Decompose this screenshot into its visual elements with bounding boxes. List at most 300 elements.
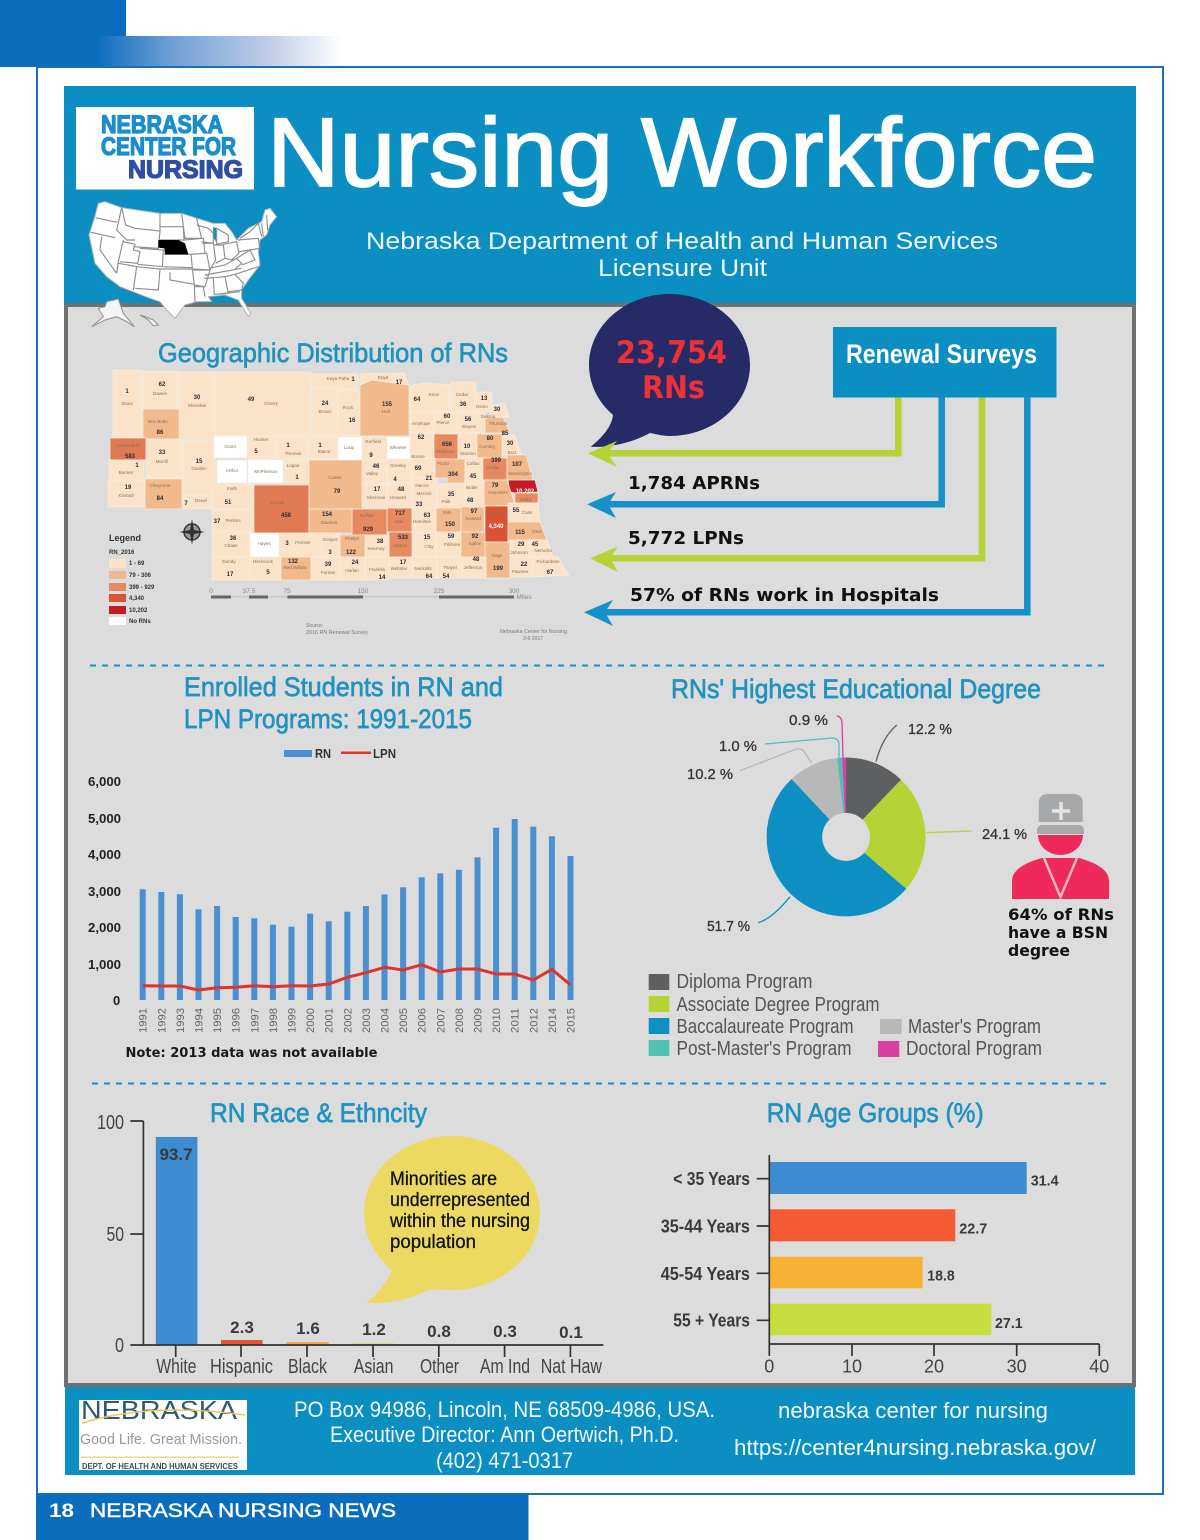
text: survey statistics: 1,784 APRNs <box>628 473 760 494</box>
county labels: Morrill <box>156 459 168 464</box>
magazine footer bar: NEBRASKA NURSING NEWS <box>90 1501 396 1522</box>
county labels: Johnson <box>510 550 528 555</box>
county labels: 24 <box>352 560 359 566</box>
county labels: 29 <box>518 542 525 548</box>
county labels: Nance <box>415 483 429 488</box>
icon: compass rose <box>179 519 205 545</box>
county labels: 4 <box>393 477 397 483</box>
map legend: Legend <box>109 533 141 543</box>
note: 2013 data: Note: 2013 data was not available <box>126 1046 378 1061</box>
website <box>734 1398 1097 1460</box>
map source notes: Source: <box>306 623 323 629</box>
county labels: 97 <box>471 509 478 515</box>
county labels: 45 <box>470 474 477 480</box>
contact details: Executive Director: Ann Oertwich, Ph.D. <box>330 1422 679 1447</box>
county labels: 69 <box>415 466 422 472</box>
subtitle: Nebraska Department of Health and Human Services <box>366 228 998 255</box>
county labels: Butler <box>466 485 478 490</box>
county labels: 1 <box>295 475 299 481</box>
bar chart: RN race and ethnicity: 50 <box>106 1224 124 1246</box>
county labels: Wheeler <box>389 445 407 450</box>
county labels: Arthur <box>226 468 239 473</box>
arrow: Renewal Surveys to RNs <box>588 397 898 467</box>
map legend: 1 - 69 <box>129 561 145 567</box>
bar chart: RN race and ethnicity: 2.3 <box>230 1318 254 1337</box>
county labels: 304 <box>448 472 459 478</box>
icon: Nebraska state <box>158 240 188 254</box>
county labels: 35 <box>448 492 455 498</box>
text: 64% of RNs have a BSN degree: 64% of RNs <box>1008 905 1114 924</box>
county labels: 132 <box>288 559 299 565</box>
bar chart: RN race and ethnicity: Nat Haw <box>541 1356 602 1378</box>
year labels: 2012 <box>528 1008 540 1033</box>
county labels: 19 <box>125 485 132 491</box>
website: nebraska center for nursing <box>778 1398 1048 1423</box>
county labels: Brown <box>318 409 332 414</box>
arrow: Renewal Surveys to APRNs <box>587 397 942 518</box>
county labels: 5 <box>266 570 270 576</box>
county labels: Lincoln <box>270 500 285 505</box>
donut legend <box>649 971 1042 1060</box>
county labels: 656 <box>442 442 453 448</box>
arrow: Renewal Surveys to LPNs <box>590 397 982 572</box>
y axis labels: 0 <box>113 993 120 1008</box>
year labels: 2010 <box>491 1008 503 1033</box>
county labels: 399 <box>491 458 502 464</box>
county labels: 24 <box>322 401 329 407</box>
year labels: 2011 <box>510 1008 522 1033</box>
county labels: Knox <box>429 392 440 397</box>
county labels: 79 <box>492 483 499 489</box>
map legend <box>109 533 155 625</box>
donut legend: Doctoral Program <box>906 1038 1042 1060</box>
county labels: 84 <box>157 496 164 502</box>
map scale bar <box>209 588 532 601</box>
county labels: Clay <box>424 544 434 549</box>
county labels: Saline <box>469 541 482 546</box>
heading: RNs' Highest Educational Degree: RNs' Highest Educational Degree <box>671 674 1041 704</box>
year labels: 2002 <box>342 1008 354 1033</box>
county labels: Deuel <box>195 498 207 503</box>
county labels: 115 <box>515 530 525 536</box>
y axis labels: 3,000 <box>88 884 121 899</box>
county labels: Valley <box>366 471 379 476</box>
map source notes: 2016 RN Renewal Survey <box>306 630 369 636</box>
year labels: 2001 <box>324 1008 336 1033</box>
donut chart: educational degree <box>687 712 1027 935</box>
county labels: York <box>442 510 452 515</box>
percentage labels <box>687 712 1027 935</box>
county labels: 4,340 <box>488 524 504 530</box>
county labels: Banner <box>119 470 134 475</box>
county labels: Merrick <box>416 491 432 496</box>
county labels: Gosper <box>322 537 338 542</box>
donut legend: Diploma Program <box>676 971 812 993</box>
bar chart: RN age groups: 45-54 Years <box>661 1264 750 1284</box>
county labels: Washington <box>508 471 532 476</box>
logo: Nebraska Center for Nursing: NEBRASKA <box>101 111 223 139</box>
county labels: 717 <box>395 511 406 517</box>
map legend: RN_2016 <box>109 550 135 556</box>
county labels: Dodge <box>486 465 500 470</box>
county labels: Buffalo <box>360 513 375 518</box>
county labels: 60 <box>444 414 451 420</box>
county labels: Boyd <box>378 375 389 380</box>
text: survey statistics <box>628 473 939 606</box>
county labels: 62 <box>418 435 425 441</box>
callout: minorities underrepresented: Minorities are <box>390 1169 497 1190</box>
county labels: Webster <box>390 566 408 571</box>
map scale bar: 75 <box>283 588 291 595</box>
heading: RN Age Groups: RN Age Groups (%) <box>767 1098 984 1128</box>
county labels: 30 <box>494 407 501 413</box>
county labels: 48 <box>473 557 480 563</box>
contact details: (402) 471-0317 <box>436 1448 573 1473</box>
year labels: 1997 <box>249 1008 261 1033</box>
county labels: 86 <box>157 430 164 436</box>
bar chart: RN age groups: 0 <box>764 1357 774 1377</box>
callout: 23,754 RNs speech bubble: 23,754 <box>616 335 727 371</box>
callout: minorities underrepresented: population <box>390 1232 476 1253</box>
county labels: Pierce <box>436 420 450 425</box>
donut legend: Post-Master's Program <box>676 1038 852 1060</box>
county labels: 63 <box>424 513 431 519</box>
y axis labels: 6,000 <box>88 774 121 789</box>
bar chart: RN race and ethnicity: 1.6 <box>296 1319 320 1338</box>
county labels: Perkins <box>225 518 241 523</box>
county labels: Thomas <box>285 451 302 456</box>
county labels: Cheyenne <box>150 483 171 488</box>
bar chart: RN race and ethnicity: 0.3 <box>493 1322 517 1341</box>
callout: minorities underrepresented <box>364 1136 540 1303</box>
county labels: Sherman <box>367 495 386 500</box>
county labels: 155 <box>382 402 393 408</box>
year labels: 2003 <box>361 1008 373 1033</box>
county labels: Greeley <box>390 463 407 468</box>
year labels: 2004 <box>380 1008 392 1033</box>
logo: Nebraska Center for Nursing: CENTER FOR <box>101 133 236 161</box>
logo: Nebraska Good Life Great Mission: DEPT. OF HEALTH AND HUMAN SERVICES <box>82 1462 239 1471</box>
box: Renewal Surveys <box>833 327 1056 398</box>
LPN line <box>143 965 570 990</box>
county labels: 48 <box>398 487 405 493</box>
bar chart: RN race and ethnicity: Black <box>288 1356 328 1378</box>
chart legend: RN and LPN: RN <box>315 746 331 761</box>
county labels: Wayne <box>462 424 477 429</box>
panel: header band <box>64 86 1136 303</box>
county labels: Grant <box>224 444 236 449</box>
percentage labels: 24.1 % <box>982 826 1027 843</box>
county labels: 458 <box>281 513 292 519</box>
county labels: Kimball <box>118 493 134 498</box>
heading: Enrolled Students <box>184 672 503 734</box>
county labels: Sarpy <box>520 497 533 502</box>
percentage labels: 10.2 % <box>687 766 733 783</box>
county labels: 929 <box>363 527 374 533</box>
county labels: 45 <box>532 542 539 548</box>
year labels: 2005 <box>398 1008 410 1033</box>
county labels: Harlan <box>345 568 359 573</box>
county labels: 55 <box>513 508 520 514</box>
county labels: 107 <box>512 462 523 468</box>
bar chart: RN race and ethnicity: Other <box>420 1356 459 1378</box>
county labels: Richardson <box>536 559 560 564</box>
county labels: Keya Paha <box>327 376 350 381</box>
percentage labels: 1.0 % <box>719 738 757 755</box>
county labels: Adams <box>393 543 408 548</box>
county labels: Dixon <box>476 404 488 409</box>
text: survey statistics: 57% of RNs work in Hospitals <box>630 585 939 606</box>
year labels: 1991 <box>138 1008 150 1033</box>
county labels: 80 <box>487 436 494 442</box>
year labels: 1993 <box>175 1008 187 1033</box>
bar chart: RN race and ethnicity: 0.1 <box>559 1323 583 1342</box>
heading: Enrolled Students: Enrolled Students in RN and <box>184 672 503 702</box>
county labels: Lancaster <box>488 512 509 517</box>
bar chart: RN age groups: 27.1 <box>995 1315 1023 1332</box>
year labels: 1994 <box>194 1008 206 1033</box>
map scale bar: 0 <box>209 588 213 595</box>
percentage labels: 51.7 % <box>707 918 750 935</box>
year labels: 1992 <box>156 1008 168 1033</box>
map scale bar: 300 <box>509 588 520 595</box>
year labels: 1999 <box>286 1008 298 1033</box>
county labels: Dawes <box>153 391 168 396</box>
county labels: 15 <box>424 535 431 541</box>
county labels: 39 <box>325 562 332 568</box>
map: Nebraska RN distribution by county <box>108 370 569 642</box>
county labels: 48 <box>467 498 474 504</box>
county labels: 51 <box>225 500 232 506</box>
county labels: 9 <box>369 453 373 459</box>
panel: footer band <box>65 1387 1135 1475</box>
RN bars <box>140 819 573 1000</box>
county labels: Polk <box>442 499 451 504</box>
map legend: No RNs <box>129 619 151 625</box>
y axis labels: 5,000 <box>88 811 121 826</box>
county labels: Kearney <box>367 546 385 551</box>
county labels: Otoe <box>532 529 542 534</box>
percentage labels: 12.2 % <box>908 721 952 738</box>
bar chart: RN race and ethnicity: 0.8 <box>427 1322 451 1341</box>
county labels: Dawson <box>321 520 338 525</box>
county labels: Loup <box>344 445 355 450</box>
county labels: Jefferson <box>464 565 483 570</box>
county labels: 10,202 <box>516 489 535 495</box>
county labels: Logan <box>287 463 300 468</box>
county labels: Seward <box>465 516 481 521</box>
year labels: 1995 <box>212 1008 224 1033</box>
county labels: Cherry <box>264 401 279 406</box>
county labels: Furnas <box>321 570 336 575</box>
county labels: 17 <box>227 572 234 578</box>
logo: Nebraska Center for Nursing <box>76 107 254 190</box>
box: Renewal Surveys: Renewal Surveys <box>846 339 1037 369</box>
county labels: 30 <box>194 395 201 401</box>
year labels: 2014 <box>547 1008 559 1033</box>
county labels: Garden <box>191 466 207 471</box>
county labels: 33 <box>159 450 166 456</box>
chart legend: RN and LPN <box>284 746 396 761</box>
county labels: 150 <box>445 522 456 528</box>
map legend: 10,202 <box>129 608 148 614</box>
bar chart: RN race and ethnicity: Asian <box>354 1356 393 1378</box>
year labels: 2000 <box>305 1008 317 1033</box>
map source notes <box>306 623 567 642</box>
county labels: Hayes <box>257 541 271 546</box>
icon: US map with Nebraska highlighted <box>89 202 277 327</box>
county labels: Chase <box>224 543 238 548</box>
county labels: 85 <box>502 431 509 437</box>
county labels: Franklin <box>369 567 386 572</box>
county labels: 5 <box>254 449 258 455</box>
map source notes: Nebraska Center for Nursing <box>500 629 567 635</box>
county labels: 62 <box>159 382 166 388</box>
bar chart: RN race and ethnicity: 1.2 <box>362 1320 386 1339</box>
county labels: 1 <box>135 463 139 469</box>
county labels: Thayer <box>443 565 458 570</box>
donut legend: Master's Program <box>908 1016 1041 1038</box>
bar chart: RN race and ethnicity: White <box>156 1356 196 1378</box>
magazine footer bar <box>36 1494 528 1540</box>
y axis labels: 2,000 <box>88 920 121 935</box>
county labels: Thurston <box>489 421 508 426</box>
bar chart: RN age groups: 30 <box>1007 1357 1027 1377</box>
county labels: Sheridan <box>188 403 207 408</box>
heading: Geographic Distribution of RNs: Geographic Distribution of RNs <box>158 338 508 368</box>
county labels: Holt <box>382 409 391 414</box>
county labels: Custer <box>328 475 342 480</box>
subtitle: Licensure Unit <box>598 255 767 282</box>
county labels: Antelope <box>412 421 431 426</box>
bar chart: RN age groups <box>661 1155 1109 1377</box>
county labels: 36 <box>230 536 237 542</box>
county labels: 10 <box>464 444 471 450</box>
bar and line chart: enrolled students <box>88 774 578 1033</box>
logo: Nebraska Good Life Great Mission <box>79 1395 247 1471</box>
county labels: 1 <box>318 443 322 449</box>
county labels: Frontier <box>295 540 311 545</box>
county labels: Cedar <box>456 392 469 397</box>
county labels: Nuckolls <box>414 566 432 571</box>
map scale bar: 225 <box>434 588 445 595</box>
county labels: 36 <box>460 402 467 408</box>
county labels: Rock <box>343 405 354 410</box>
county labels: 67 <box>547 570 554 576</box>
percentage labels: 0.9 % <box>789 712 828 729</box>
subtitle <box>366 228 998 282</box>
county labels: Platte <box>437 461 449 466</box>
bar chart: RN age groups: 20 <box>924 1357 944 1377</box>
county labels: Keith <box>227 486 238 491</box>
panel: grey body <box>66 305 1134 1385</box>
donut legend: Baccalaureate Program <box>676 1016 854 1038</box>
county labels: 154 <box>322 512 333 518</box>
county labels: Howard <box>390 495 406 500</box>
year labels: 2008 <box>454 1008 466 1033</box>
bar chart: RN race and ethnicity: 0 <box>115 1335 124 1357</box>
logo: Nebraska Good Life Great Mission: NEBRASKA <box>81 1395 238 1425</box>
county labels: 17 <box>374 487 381 493</box>
bar chart: RN age groups: < 35 Years <box>673 1169 750 1189</box>
bar chart: RN age groups: 22.7 <box>959 1220 987 1237</box>
county labels: 583 <box>125 454 136 460</box>
map legend: 4,340 <box>129 596 145 602</box>
y axis labels: 4,000 <box>88 847 121 862</box>
year labels: 2006 <box>417 1008 429 1033</box>
callout: minorities underrepresented: within the nursing <box>389 1211 530 1232</box>
leader lines <box>740 716 972 923</box>
county labels: 122 <box>346 550 357 556</box>
county labels: 56 <box>465 417 472 423</box>
text: 64% of RNs have a BSN degree: degree <box>1008 941 1070 960</box>
county labels: Madison <box>436 449 454 454</box>
icon: nurse <box>1012 794 1109 899</box>
county labels: Blaine <box>318 449 331 454</box>
county labels: Hitchcock <box>253 559 274 564</box>
county labels: Sioux <box>121 401 133 406</box>
bar chart: RN age groups: 35-44 Years <box>661 1217 750 1237</box>
year labels: 1996 <box>231 1008 243 1033</box>
county labels: Nemaha <box>534 548 552 553</box>
county labels: Box Butte <box>148 419 168 424</box>
county labels: Dundy <box>222 559 236 564</box>
county labels: 38 <box>377 539 384 545</box>
magazine top banner <box>0 0 342 67</box>
arrow: Renewal Surveys to hospitals <box>584 397 1027 626</box>
county labels: 33 <box>416 502 423 508</box>
icon: Alaska and Hawaii <box>92 299 158 327</box>
county labels: Stanton <box>460 451 476 456</box>
county labels: Cass <box>522 510 533 515</box>
chart legend: RN and LPN: LPN <box>373 746 396 761</box>
county labels: 14 <box>379 575 386 581</box>
bar chart: RN race and ethnicity: Am Ind <box>480 1356 530 1378</box>
callout: 23,754 RNs speech bubble: RNs <box>642 370 705 406</box>
year labels <box>138 1008 577 1033</box>
contact details <box>294 1397 715 1473</box>
county labels: 1 <box>125 389 129 395</box>
contact details: PO Box 94986, Lincoln, NE 68509-4986, USA. <box>294 1397 715 1422</box>
bar chart: RN age groups: 10 <box>842 1357 862 1377</box>
year labels: 2009 <box>472 1008 484 1033</box>
county labels: Colfax <box>466 461 480 466</box>
county labels: 30 <box>507 441 514 447</box>
website: https://center4nursing.nebraska.gov/ <box>734 1435 1097 1460</box>
county labels: 3 <box>328 550 332 556</box>
map scale bar: 150 <box>358 588 369 595</box>
county labels: Hall <box>395 519 403 524</box>
county labels: 22 <box>521 562 528 568</box>
donut legend: Associate Degree Program <box>676 994 880 1016</box>
text: 64% of RNs have a BSN degree: have a BSN <box>1008 923 1108 942</box>
county labels: Phelps <box>345 536 360 541</box>
county labels: 7 <box>184 501 188 507</box>
county labels: 64 <box>426 574 433 580</box>
county labels: Boone <box>411 454 425 459</box>
county labels: 79 <box>334 489 341 495</box>
county labels: 199 <box>493 566 504 572</box>
bar chart: RN race and ethnicity: Hispanic <box>210 1356 273 1378</box>
county labels: McPherson <box>254 469 278 474</box>
text: 64% of RNs have a BSN degree <box>1008 905 1114 960</box>
heading: Enrolled Students: LPN Programs: 1991-2015 <box>184 704 472 734</box>
county labels: Saunders <box>488 490 509 495</box>
map scale bar: 37.5 <box>243 588 256 595</box>
county labels: 1 <box>351 377 355 383</box>
county labels: Hooker <box>254 437 269 442</box>
county labels: Hamilton <box>413 519 432 524</box>
